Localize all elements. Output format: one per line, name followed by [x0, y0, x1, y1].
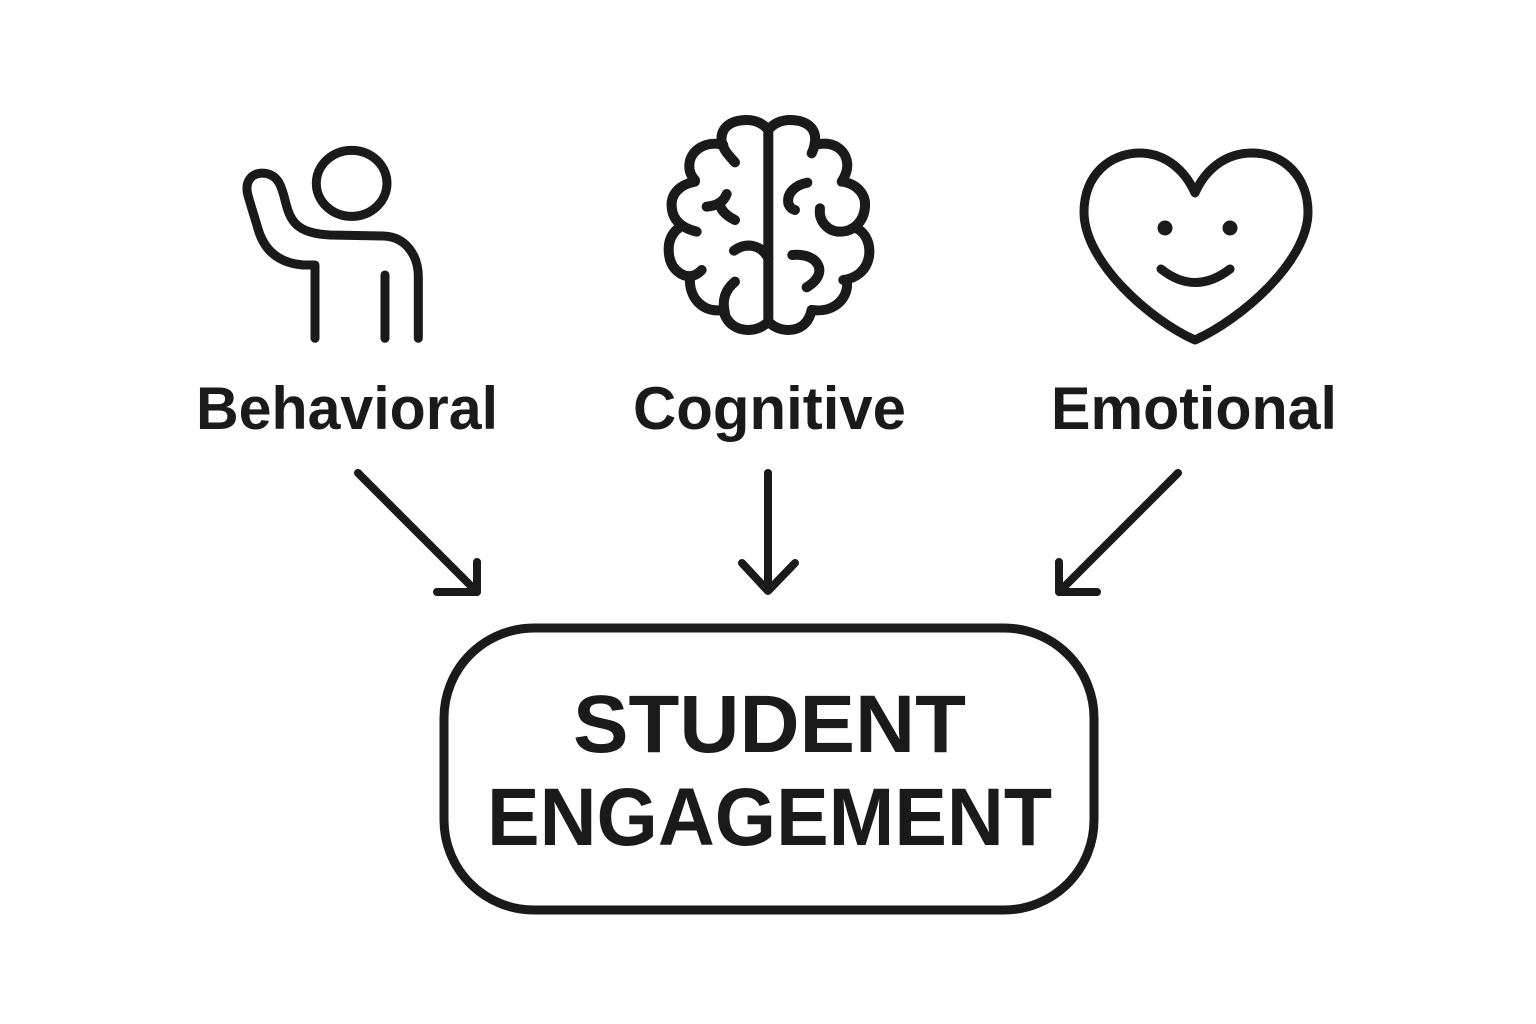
box: student engagement: STUDENT [573, 679, 966, 770]
icon: smiling heart [1084, 153, 1308, 340]
arrow: behavioral to engagement [358, 473, 477, 592]
box: student engagement [444, 628, 1094, 910]
label: Behavioral: Behavioral [196, 375, 498, 442]
box: student engagement: ENGAGEMENT [487, 772, 1052, 863]
label: Cognitive: Cognitive [633, 375, 906, 442]
icon: person raising hand [247, 150, 418, 338]
icon: brain [669, 120, 869, 330]
arrow: emotional to engagement [1059, 473, 1178, 592]
label: Emotional: Emotional [1051, 375, 1337, 442]
arrow: cognitive to engagement [742, 473, 795, 591]
